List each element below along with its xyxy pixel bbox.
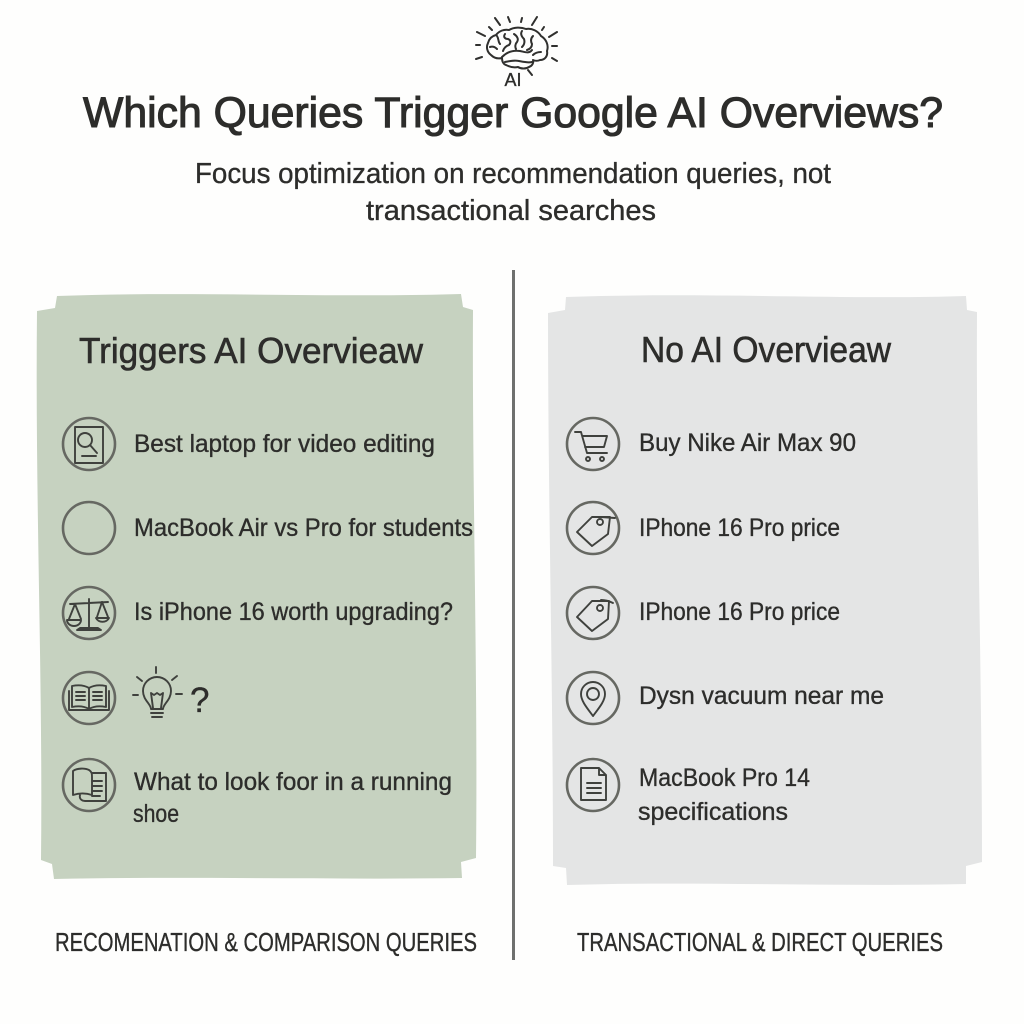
row: best laptop: Best laptop for video editing bbox=[134, 430, 435, 458]
icon: AI brain: AI bbox=[504, 70, 522, 90]
row: iphone worth upgrading: Is iPhone 16 worth upgrading? bbox=[134, 598, 453, 626]
icon: guide book bbox=[63, 759, 115, 811]
row: macbook air vs pro: MacBook Air vs Pro for students bbox=[134, 514, 473, 542]
icon: lightbulb bbox=[133, 667, 182, 717]
row: buy nike bbox=[567, 418, 856, 470]
row: buy nike: Buy Nike Air Max 90 bbox=[639, 429, 856, 457]
row: macbook air vs pro bbox=[63, 502, 473, 554]
icon: scales bbox=[63, 587, 115, 639]
panel: triggers AI overview bbox=[37, 294, 476, 879]
row: running shoe bbox=[63, 759, 452, 828]
icon: search document bbox=[63, 418, 115, 470]
panel: no AI overview bbox=[548, 295, 982, 885]
title: Which Queries Trigger Google AI Overviews? bbox=[83, 89, 943, 137]
icon: map pin bbox=[567, 672, 619, 724]
row: macbook specs: MacBook Pro 14 bbox=[639, 764, 810, 792]
row: dyson near me: Dysn vacuum near me bbox=[639, 682, 884, 710]
icon: AI brain bbox=[476, 17, 557, 90]
icon: price tag bbox=[567, 502, 619, 554]
row: running shoe: shoe bbox=[133, 800, 179, 828]
row: running shoe: What to look foor in a running bbox=[134, 768, 452, 796]
caption: left: RECOMENATION & COMPARISON QUERIES bbox=[55, 927, 477, 957]
row: lightbulb question bbox=[63, 667, 209, 724]
center divider bbox=[512, 270, 515, 960]
row: iphone price 2: IPhone 16 Pro price bbox=[639, 598, 840, 626]
row: dyson near me bbox=[567, 672, 884, 724]
subtitle: Focus optimization on recommendation queries, not bbox=[195, 158, 831, 190]
icon: empty circle bbox=[63, 502, 115, 554]
heading: triggers: Triggers AI Overvieaw bbox=[79, 330, 424, 371]
row: iphone price 2 bbox=[567, 587, 840, 639]
row: lightbulb question: ? bbox=[190, 681, 209, 720]
row: iphone worth upgrading bbox=[63, 587, 453, 639]
row: iphone price 1: IPhone 16 Pro price bbox=[639, 514, 840, 542]
icon: open book bbox=[63, 672, 115, 724]
icon: document bbox=[567, 759, 619, 811]
subtitle bbox=[195, 158, 831, 227]
panel background: gray bbox=[548, 295, 982, 885]
row: macbook specs bbox=[567, 759, 810, 826]
row: iphone price 1 bbox=[567, 502, 840, 554]
row: macbook specs: specifications bbox=[638, 798, 788, 826]
panel background: green bbox=[37, 294, 476, 879]
heading: no overview: No AI Overvieaw bbox=[641, 329, 892, 370]
row: best laptop bbox=[63, 418, 435, 470]
icon: price tag bbox=[567, 587, 619, 639]
icon: shopping cart bbox=[567, 418, 619, 470]
subtitle: transactional searches bbox=[366, 195, 656, 227]
